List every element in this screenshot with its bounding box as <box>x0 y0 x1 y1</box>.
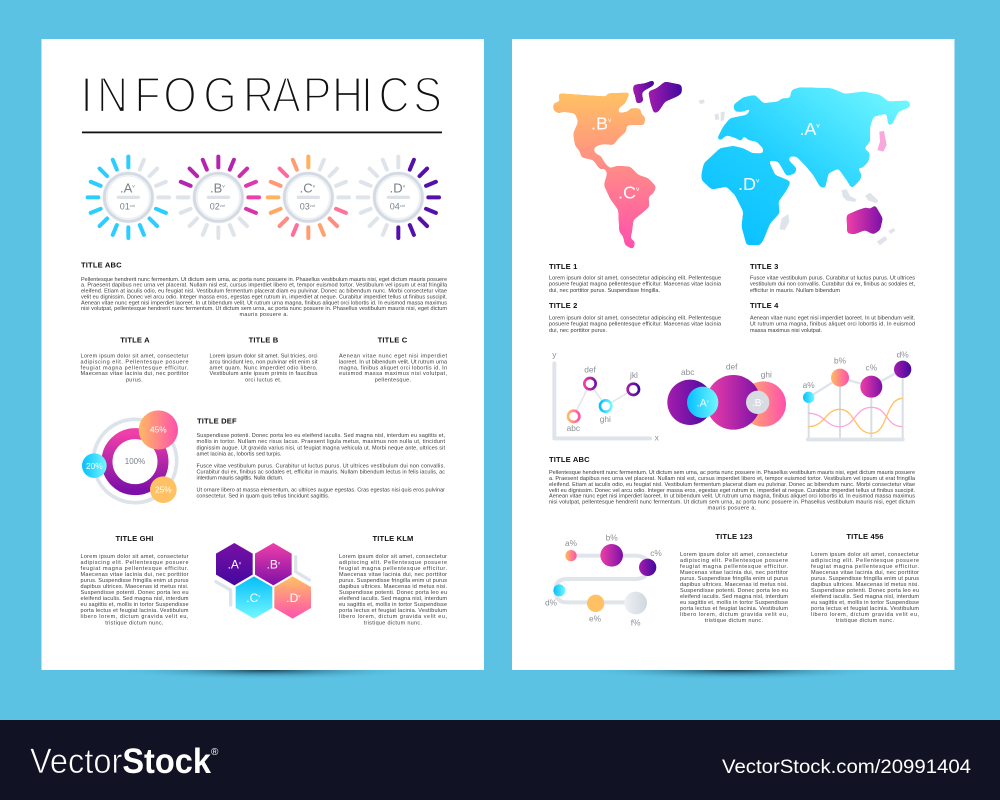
text block: title abc: nisi volutpat, pellentesque hendrerit nunc fermentum. Ut dictum sem urna, ac porta nunc posuere in. Phasellus vestibulum mauris nisi, eget dictum <box>81 306 447 312</box>
text: title 1: dui, nec porttitor purus. Suspendisse fringilla. <box>549 288 660 294</box>
text block: title ghi: Suspendisse potenti. Donec porta leo eu <box>80 590 188 596</box>
text block: title ghi: dapibus ultrices. Maecenas id metus nisi. <box>80 584 189 590</box>
text: title a: feugiat magna pellentesque efficitur. <box>80 365 189 371</box>
heading: title def: TITLE DEF <box>197 416 237 426</box>
text block: title abc right: mauris posuere a. <box>707 506 757 512</box>
text block: title 123: dapibus ultrices. Maecenas id metus nisi. <box>680 582 788 588</box>
gauge D <box>358 157 439 238</box>
venn diagram: .B <box>752 398 761 409</box>
text block: title ghi: libero lorem, dictum gravida velit eu, <box>80 614 189 620</box>
panel: right page <box>512 39 954 670</box>
gauge B: v <box>222 184 225 190</box>
panel: left page <box>42 39 484 670</box>
text block: title 123: feugiat magna pellentesque efficitur. <box>680 564 788 570</box>
text block: title abc right: velit eu dignissim. Donec vel arcu odio. Integer massa eros, egestas eget rutrum in, imperdiet at neque. Curabitur imperdiet tellus ut finibus suscipit. <box>549 488 915 494</box>
heading: title abc right: TITLE ABC <box>549 455 590 464</box>
gauge B: 02 <box>210 202 220 212</box>
text: title 1: posuere feugiat magna pellentesque efficitur. Maecenas vitae lacinia <box>549 282 722 288</box>
gauge D: vol <box>400 203 405 208</box>
heading: title 123: TITLE 123 <box>715 532 753 541</box>
text block: title 123: libero lorem, dictum gravida velit eu, <box>680 612 788 618</box>
text: title c: magna, finibus aliquet orci lobortis id. In <box>339 365 447 371</box>
text block: title klm: adipiscing elit. Pellentesque posuere <box>339 560 447 566</box>
gray islands <box>698 99 895 245</box>
gauge B: vol <box>220 203 225 208</box>
hexagon D: .D <box>286 591 298 605</box>
text block: title ghi: porta lectus et feugiat lacinia. Vestibulum <box>80 608 189 614</box>
hexagon A: v <box>239 560 242 565</box>
text block: title ghi: adipiscing elit. Pellentesque posuere <box>80 560 188 566</box>
registered mark: ® <box>211 747 219 758</box>
venn diagram: abc <box>681 367 694 377</box>
hexagon C: v <box>258 594 261 599</box>
hexagon C: .C <box>246 591 258 605</box>
hexagon A <box>216 543 253 585</box>
lollipop curve chart: b% <box>834 356 847 366</box>
winding path chart: d% <box>545 597 558 607</box>
hexagon chart <box>216 543 311 619</box>
text block: title klm: libero lorem, dictum gravida velit eu, <box>339 614 447 620</box>
text block: title ghi: eleifend iaculis. Sed magna nisl, interdum <box>80 596 189 602</box>
heading: title c: TITLE C <box>378 336 408 344</box>
venn diagram <box>667 361 786 430</box>
text block: title abc <box>81 277 448 318</box>
text block: title 456: purus. Suspendisse fringilla enim ut purus <box>811 576 919 582</box>
text: title c: pellentesque. <box>375 378 411 384</box>
line scatter chart: ghi <box>600 414 611 424</box>
text block: title abc right: nisi volutpat, pellentesque hendrerit nunc fermentum. Ut dictum sem urna, ac porta nunc posuere in. Phasellus vestibulum mauris nisi, eget dictum <box>549 500 915 506</box>
hexagon B: v <box>278 560 281 565</box>
footer logo: VectorStock <box>30 742 211 781</box>
heading: title ghi: TITLE GHI <box>115 534 154 543</box>
text block: title 456: eu sagittis et, mollis in tortor Suspendisse <box>811 600 919 606</box>
map labels: v <box>816 123 820 130</box>
hexagon A: .A <box>228 558 239 572</box>
text: title b <box>210 354 318 384</box>
region: Japan <box>877 131 887 152</box>
text block: title 123: porta lectus et feugiat lacinia. Vestibulum <box>680 606 788 612</box>
text block: title 456: Suspendisse potenti. Donec porta leo eu <box>811 588 919 594</box>
winding path chart: b% <box>606 533 618 543</box>
winding path chart: e% <box>589 614 602 624</box>
text block: title 456: porta lectus et feugiat lacinia. Vestibulum <box>811 606 919 612</box>
text block: title ghi: tristique dictum nunc. <box>105 620 164 626</box>
text: title a <box>80 354 189 384</box>
line scatter chart: y <box>552 349 557 359</box>
text: title 1: Lorem ipsum dolor sit amet, consectetur adipiscing elit. Pellentesque <box>549 275 721 281</box>
bubble 45%: 45% <box>150 425 167 435</box>
hexagon C <box>236 576 272 619</box>
text block: title def: dignissim augue. Ut gravida varius nisi, ut feugiat magna vehicula ut. Morbi neque ante, ultrices sit <box>196 446 445 452</box>
text block: title 456: adipiscing elit. Pellentesque posuere <box>811 558 919 564</box>
text: title a: adipiscing elit. Pellentesque posuere <box>80 359 188 365</box>
text block: title abc: Pellentesque hendrerit nunc fermentum. Ut dictum sem urna, ac porta nunc posuere in. Phasellus vestibulum mauris nisi, eget dictum mauris posuere <box>81 277 447 283</box>
text: title b: arcu tincidunt leo, non pulvinar elit enim sit <box>210 359 318 365</box>
text block: title abc: velit eu dignissim. Donec vel arcu odio. Integer massa eros, egestas eget rutrum in, imperdiet at neque. Curabitur imperdiet tellus ut finibus suscipit. <box>81 294 447 300</box>
gauge A: v <box>132 184 135 190</box>
text block: title 456 <box>811 552 919 624</box>
title: INFOGRAPHICS <box>81 67 442 123</box>
text: title 4: Ut rutrum urna magna, finibus aliquet orci lobortis id. In euismod <box>750 322 915 328</box>
text block: title klm: Lorem ipsum dolor sit amet, consectetur <box>339 554 447 560</box>
text: title b: Vestibulum ante ipsum primis in faucibus <box>210 371 318 377</box>
text block: title abc right: eleifend. Etiam at iaculis odio, eu feugiat nisl. Vestibulum fermentum placerat diam eu pulvinar. Donec ac bibendum nunc. Morbi consectetur vitae <box>549 482 915 488</box>
text: title 2 <box>549 315 722 334</box>
text: title 1 <box>549 275 722 294</box>
text block: title def: Curabitur dui ex, finibus ac sodales et, efficitur in mauris. Nullam bibendum lectus in felis iaculis, ac <box>196 470 445 476</box>
text block: title 123 <box>680 552 788 624</box>
text block: title def: consectetur. Sed in quam quis tellus tincidunt sagittis. <box>196 494 330 500</box>
bubble 20%: 20% <box>86 461 103 471</box>
bubble 25%: 25% <box>155 485 172 495</box>
lollipop curve chart <box>803 350 911 441</box>
text block: title ghi: eu sagittis et, mollis in tortor Suspendisse <box>80 602 188 608</box>
heading: title 4: TITLE 4 <box>750 301 779 310</box>
text: title 4: Aenean vitae nunc eget nisi imperdiet laoreet. In ut bibendum velit. <box>750 315 915 321</box>
text: title 2: posuere feugiat magna pellentesque efficitur. Maecenas vitae lacinia <box>549 322 722 328</box>
text: title 2: Lorem ipsum dolor sit amet, consectetur adipiscing elit. Pellentesque <box>549 315 721 321</box>
text block: title 123: tristique dictum nunc. <box>705 618 763 624</box>
text block: title klm: feugiat magna pellentesque efficitur. <box>339 566 447 572</box>
text block: title klm: Suspendisse potenti. Donec porta leo eu <box>339 590 447 596</box>
text block: title abc right: Pellentesque hendrerit nunc fermentum. Ut dictum sem urna, ac porta nunc posuere in. Phasellus vestibulum mauris nisi, eget dictum mauris posuere <box>549 470 915 476</box>
hexagon B: .B <box>267 558 278 572</box>
heading: title a: TITLE A <box>120 336 150 344</box>
world map <box>553 80 911 249</box>
region: Australia <box>847 205 883 234</box>
text: title 3 <box>750 275 915 294</box>
text: title b: orci luctus et. <box>245 378 282 384</box>
text: title a: Maecenas vitae lacinia dui, nec porttitor <box>80 371 189 377</box>
text block: title klm: porta lectus et feugiat lacinia. Vestibulum <box>339 608 447 614</box>
text block: title 123: eleifend iaculis. Sed magna nisl, interdum <box>680 594 788 600</box>
gauges row <box>88 157 439 238</box>
text block: title ghi <box>80 554 189 626</box>
text: title b: Lorem ipsum dolor sit amet. Sul tricies, orci <box>210 354 318 360</box>
text block: title 456: feugiat magna pellentesque efficitur. <box>811 564 919 570</box>
text block: title abc: Aenean vitae nunc eget nisi imperdiet laoreet. In ut bibendum velit. Ut rutrum urna magna, finibus aliquet orci lobortis id. In euismod massa maximus <box>81 300 447 306</box>
gauge D: .D <box>390 181 403 196</box>
text block: title abc: a. Praesent dapibus nec urna vel placerat. Nullam nisl est, cursus imperdiet libero et, tempor euismod tortor. Vestibulum vel ipsum ut erat fringilla <box>81 283 448 289</box>
text block: title 123: eu sagittis et, mollis in tortor Suspendisse <box>680 600 788 606</box>
hexagon D <box>274 576 311 619</box>
gauge A <box>88 157 169 238</box>
heading: title 1: TITLE 1 <box>549 262 578 271</box>
text: title a: purus. <box>126 378 143 384</box>
text block: title def: Fusce vitae vestibulum purus. Curabitur ut luctus purus. Ut ultrices vestibulum dui non convallis. <box>196 464 445 470</box>
heading: title 2: TITLE 2 <box>549 301 577 310</box>
text block: title def: Suspendisse potenti. Donec porta leo eu eleifend iaculis. Sed magna nisl, interdum eu sagittis et, <box>196 433 445 439</box>
lollipop curve chart: a% <box>803 380 815 390</box>
text: title c <box>339 354 448 384</box>
donut chart <box>82 410 178 503</box>
gauge C: .C <box>300 181 313 196</box>
gauge C <box>268 157 349 238</box>
text block: title 456: eleifend iaculis. Sed magna nisl, interdum <box>811 594 919 600</box>
line scatter chart <box>552 349 660 442</box>
text block: title klm: eu sagittis et, mollis in tortor Suspendisse <box>339 602 447 608</box>
text: title 3: vestibulum dui non convallis. Curabitur dui ex, finibus ac sodales et, <box>750 282 915 288</box>
text: title c: laoreet. In ut bibendum velit. Ut rutrum urna <box>339 359 448 365</box>
footer bar <box>0 720 1000 800</box>
winding path chart: c% <box>650 548 662 558</box>
venn diagram: v <box>761 399 763 403</box>
text: title 3: Fusce vitae vestibulum purus. Curabitur ut luctus purus. Ut ultrices <box>750 275 915 281</box>
gauge B <box>178 157 259 238</box>
text: title c: euismod massa maximus nisi volutpat, <box>339 371 447 377</box>
winding path chart: f% <box>631 618 641 628</box>
map labels: v <box>756 178 760 185</box>
text block: title def: amet lacinia ac, lobortis sed turpis. <box>196 452 282 458</box>
heading: title 456: TITLE 456 <box>846 532 884 541</box>
text block: title ghi: Lorem ipsum dolor sit amet, consectetur <box>80 554 189 560</box>
gauge A: 01 <box>120 202 130 212</box>
text block: title def: Ut ornare libero at massa elementum, ac ultrices augue egestas. Cras egestas nisi quis eros pulvinar <box>196 488 445 494</box>
text: title 4: massa maximus nisi volutpat. <box>750 328 822 334</box>
gauge C: vol <box>310 203 315 208</box>
map labels <box>591 113 820 202</box>
map labels: .D <box>738 174 756 194</box>
text: title 4 <box>750 315 915 334</box>
text block: title abc: mauris posuere a. <box>239 312 289 318</box>
map labels: .A <box>799 119 816 139</box>
lollipop curve chart: c% <box>866 363 878 373</box>
text block: title 123: Suspendisse potenti. Donec porta leo eu <box>680 588 788 594</box>
text: title c: Aenean vitae nunc eget nisi imperdiet <box>339 354 447 360</box>
text block: title 456: libero lorem, dictum gravida velit eu, <box>811 612 919 618</box>
winding path chart <box>545 533 662 628</box>
footer url: VectorStock.com/20991404 <box>722 757 971 778</box>
donut chart: 100% <box>125 457 145 466</box>
text block: title 123: adipiscing elit. Pellentesque posuere <box>680 558 788 564</box>
text: title b: amet quam. Nunc imperdiet odio libero. <box>210 365 318 371</box>
line scatter chart: jkl <box>629 370 638 380</box>
gauge C: v <box>313 184 316 190</box>
text block: title def: mollis in tortor. Nullam nec risus lacus. Praesent ligula metus, maximus non nulla ut, tincidunt <box>196 439 445 445</box>
text block: title 456: Maecenas vitae lacinia dui, nec porttitor <box>811 570 919 576</box>
text block: title 123: purus. Suspendisse fringilla enim ut purus <box>680 576 788 582</box>
text block: title def: interdum mauris sagittis. Nulla dictum. <box>196 476 284 482</box>
text block: title klm: Maecenas vitae lacinia dui, nec porttitor <box>339 572 447 578</box>
line scatter chart: x <box>655 432 660 442</box>
text block: title 456: Lorem ipsum dolor sit amet, consectetur <box>811 552 919 558</box>
text block: title ghi: feugiat magna pellentesque efficitur. <box>80 566 189 572</box>
text: title a: Lorem ipsum dolor sit amet, consectetur <box>80 354 189 360</box>
gauge D: v <box>403 184 406 190</box>
text block: title klm: tristique dictum nunc. <box>364 620 422 626</box>
venn diagram: .A <box>697 397 707 409</box>
text block: title 456: dapibus ultrices. Maecenas id metus nisi. <box>811 582 919 588</box>
shadow under right page <box>578 670 888 690</box>
hexagon D: v <box>298 594 301 599</box>
venn diagram: def <box>726 361 738 371</box>
region: Eurasia and Africa <box>702 87 911 245</box>
shadow under left page <box>110 670 420 690</box>
map labels: v <box>636 186 640 193</box>
text: title 3: efficitur in mauris. Nullam bibendum <box>750 288 840 294</box>
text block: title abc: eleifend. Etiam at iaculis odio, eu feugiat nisl. Vestibulum fermentum placerat diam eu pulvinar. Donec ac bibendum nunc. Morbi consectetur vitae <box>81 288 447 294</box>
text block: title 456: tristique dictum nunc. <box>836 618 894 624</box>
text block: title abc right <box>549 470 916 512</box>
map labels: .B <box>591 113 608 133</box>
gauge C: 03 <box>300 202 310 212</box>
text block: title def <box>196 433 445 500</box>
line scatter chart: abc <box>567 423 580 433</box>
text: title 2: dui, nec porttitor purus. <box>549 328 607 334</box>
map labels: .C <box>618 182 636 202</box>
map labels: v <box>608 117 612 124</box>
gauge A: .A <box>120 181 132 196</box>
gauge D: 04 <box>390 202 400 212</box>
text block: title 123: Lorem ipsum dolor sit amet, consectetur <box>680 552 788 558</box>
heading: title abc: TITLE ABC <box>81 260 122 270</box>
text block: title klm: dapibus ultrices. Maecenas id metus nisi. <box>339 584 447 590</box>
heading: title b: TITLE B <box>249 336 279 344</box>
line scatter chart: def <box>584 364 596 374</box>
venn diagram: v <box>707 398 709 403</box>
text block: title klm: purus. Suspendisse fringilla enim ut purus <box>339 578 447 584</box>
lollipop curve chart: d% <box>897 350 909 360</box>
venn diagram: ghi <box>761 370 772 380</box>
heading: title klm: TITLE KLM <box>372 534 414 543</box>
text block: title klm <box>339 554 447 626</box>
text block: title ghi: Maecenas vitae lacinia dui, nec porttitor <box>80 572 189 578</box>
text block: title ghi: purus. Suspendisse fringilla enim ut purus <box>80 578 189 584</box>
gauge A: vol <box>130 203 135 208</box>
hexagon B <box>255 543 292 585</box>
text block: title klm: eleifend iaculis. Sed magna nisl, interdum <box>339 596 447 602</box>
region: Greenland <box>633 80 682 113</box>
text block: title abc right: Aenean vitae nunc eget nisi imperdiet laoreet. In ut bibendum velit. Ut rutrum urna magna, finibus aliquet orci lobortis id. In euismod massa maximus <box>549 494 915 500</box>
text block: title 123: Maecenas vitae lacinia dui, nec porttitor <box>680 570 788 576</box>
region: Americas <box>553 93 656 249</box>
gauge B: .B <box>210 181 222 196</box>
title underline <box>82 132 442 133</box>
text block: title abc right: a. Praesent dapibus nec urna vel placerat. Nullam nisl est, cursus imperdiet libero et, tempor euismod tortor. Vestibulum vel ipsum ut erat fringilla <box>549 476 916 482</box>
winding path chart: a% <box>565 538 578 548</box>
heading: title 3: TITLE 3 <box>750 262 778 271</box>
